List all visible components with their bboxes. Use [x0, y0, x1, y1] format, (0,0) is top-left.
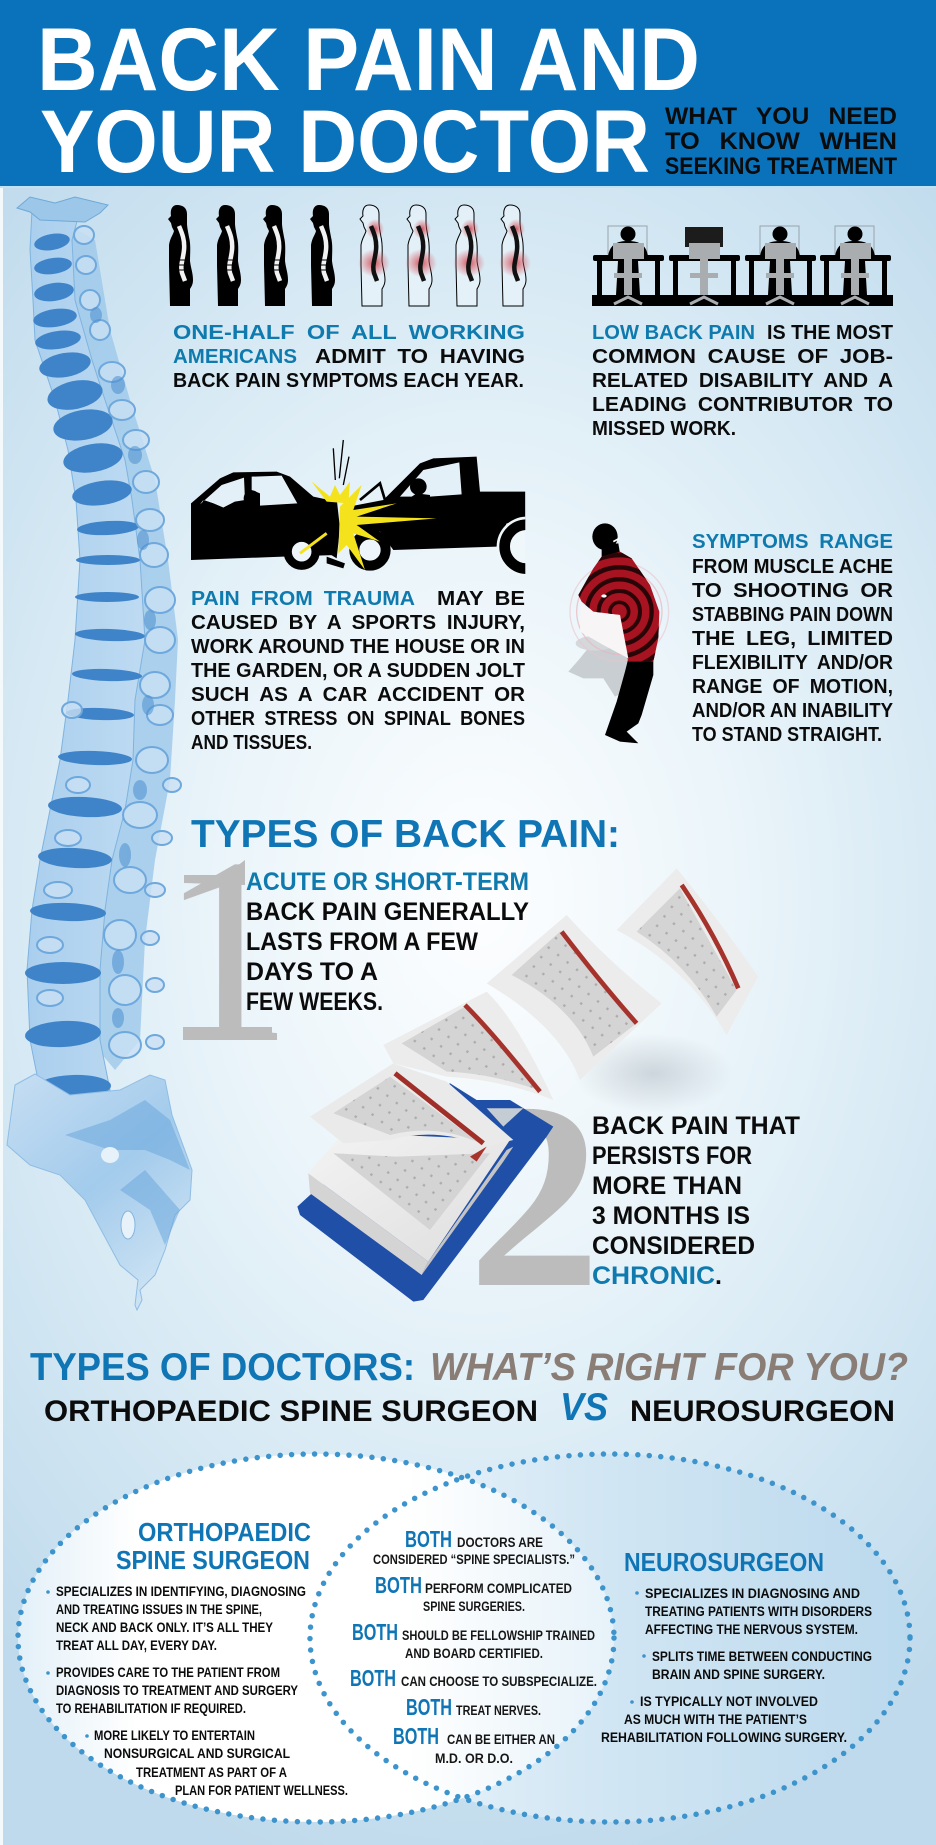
- icon: man holding back with pain target: [568, 523, 670, 744]
- text: pain from trauma: THE GARDEN, OR A SUDDEN JOLT: [191, 659, 525, 682]
- heading: types of doctors: WHAT’S RIGHT FOR YOU?: [430, 1346, 908, 1389]
- text: acute back pain: FEW WEEKS.: [246, 988, 383, 1016]
- subtitle: WHAT YOU NEED: [665, 103, 897, 130]
- text: symptoms range: AND/OR AN INABILITY: [692, 699, 893, 722]
- text: low back pain: LEADING CONTRIBUTOR TO: [592, 393, 893, 416]
- list: NONSURGICAL AND SURGICAL: [104, 1746, 290, 1761]
- heading: types of back pain: TYPES OF BACK PAIN:: [191, 813, 620, 856]
- panel: low back pain: [592, 226, 893, 440]
- list: IS TYPICALLY NOT INVOLVED: [640, 1694, 818, 1709]
- title: BACK PAIN AND: [37, 9, 700, 109]
- subtitle: SEEKING TREATMENT: [665, 153, 897, 180]
- text: pain from trauma: SUCH AS A CAR ACCIDENT OR: [191, 683, 525, 706]
- panel: both doctors: DOCTORS ARE: [457, 1535, 543, 1550]
- text: symptoms range: RANGE OF MOTION,: [692, 675, 893, 698]
- heading: ORTHOPAEDIC: [138, 1517, 311, 1547]
- list: REHABILITATION FOLLOWING SURGERY.: [601, 1730, 847, 1745]
- heading: types of doctors: TYPES OF DOCTORS:: [30, 1346, 415, 1389]
- subheading: orthopaedic vs neurosurgeon: [44, 1386, 895, 1429]
- text: one-half: BACK PAIN SYMPTOMS EACH YEAR.: [173, 369, 524, 392]
- title: [37, 9, 700, 191]
- subheading: orthopaedic vs neurosurgeon: VS: [560, 1386, 608, 1429]
- list: TREATING PATIENTS WITH DISORDERS: [645, 1604, 872, 1619]
- text: low back pain: IS THE MOST: [767, 321, 893, 344]
- heading: SPINE SURGEON: [116, 1545, 310, 1575]
- text: symptoms range: SYMPTOMS RANGE: [692, 530, 893, 553]
- panel: both doctors: BOTH: [393, 1723, 439, 1749]
- list: PLAN FOR PATIENT WELLNESS.: [175, 1783, 348, 1798]
- text: chronic back pain: .: [715, 1262, 722, 1290]
- list: DIAGNOSIS TO TREATMENT AND SURGERY: [56, 1683, 298, 1698]
- text: pain from trauma: CAUSED BY A SPORTS INJURY,: [191, 611, 525, 634]
- page 4: [617, 868, 758, 1035]
- panel: both doctors: PERFORM COMPLICATED: [425, 1581, 572, 1596]
- list: MORE LIKELY TO ENTERTAIN: [94, 1728, 255, 1743]
- panel: both doctors: BOTH: [375, 1572, 422, 1598]
- text: pain from trauma: AND TISSUES.: [191, 731, 312, 754]
- panel: orthopaedic spine surgeon: [46, 1517, 348, 1798]
- page 1: [310, 1063, 513, 1147]
- icon: eight spine silhouettes: [168, 205, 531, 306]
- panel: symptoms range: [563, 523, 893, 746]
- text: symptoms range: TO STAND STRAIGHT.: [692, 723, 882, 746]
- panel: both doctors: TREAT NERVES.: [456, 1703, 541, 1718]
- panel: both doctors: M.D. OR D.O.: [435, 1751, 513, 1766]
- text: symptoms range: FLEXIBILITY AND/OR: [692, 651, 893, 674]
- panel: both doctors: CAN CHOOSE TO SUBSPECIALIZE.: [401, 1674, 597, 1689]
- text: chronic back pain: 3 MONTHS IS: [592, 1202, 750, 1230]
- illustration: blue translucent spine: [7, 197, 192, 1310]
- list: [46, 1584, 348, 1798]
- text: low back pain: RELATED DISABILITY AND A: [592, 369, 893, 392]
- list: TO REHABILITATION IF REQUIRED.: [56, 1701, 246, 1716]
- page 3: [487, 915, 662, 1080]
- list: PROVIDES CARE TO THE PATIENT FROM: [56, 1665, 280, 1680]
- panel: both doctors: BOTH: [350, 1665, 396, 1691]
- page 2: [383, 992, 553, 1100]
- text: one-half: AMERICANS: [173, 345, 297, 368]
- subheading: orthopaedic vs neurosurgeon: NEUROSURGEON: [630, 1395, 895, 1428]
- panel: both doctors: CONSIDERED “SPINE SPECIALISTS.”: [373, 1552, 575, 1567]
- list: SPECIALIZES IN IDENTIFYING, DIAGNOSING: [56, 1584, 306, 1599]
- text: chronic back pain: BACK PAIN THAT: [592, 1112, 800, 1140]
- text: chronic back pain: CONSIDERED: [592, 1232, 755, 1260]
- panel: both doctors: SHOULD BE FELLOWSHIP TRAINED: [402, 1628, 595, 1643]
- list: SPLITS TIME BETWEEN CONDUCTING: [652, 1649, 872, 1664]
- sacrum: [7, 1074, 192, 1310]
- illustration: flying calendar pages: [297, 868, 758, 1302]
- subtitle: TO KNOW WHEN: [665, 128, 897, 155]
- heading: NEUROSURGEON: [624, 1547, 824, 1577]
- text: pain from trauma: [191, 587, 525, 754]
- text: low back pain: [592, 321, 893, 440]
- text: acute back pain: BACK PAIN GENERALLY: [246, 898, 529, 926]
- text: symptoms range: TO SHOOTING OR: [692, 579, 893, 602]
- icon: car crash: [191, 440, 557, 577]
- spinal processes: [37, 226, 181, 1058]
- text: chronic back pain: MORE THAN: [592, 1172, 742, 1200]
- panel: both doctors: SPINE SURGERIES.: [423, 1599, 525, 1614]
- panel: both doctors: [350, 1526, 597, 1766]
- subtitle: [665, 103, 897, 180]
- header banner: [0, 0, 936, 191]
- numeral 2: 2: [468, 1048, 601, 1343]
- panel: one-half of working Americans: [168, 205, 531, 392]
- text: acute back pain: ACUTE OR SHORT-TERM: [246, 868, 529, 896]
- text: one-half: ADMIT TO HAVING: [315, 345, 525, 368]
- text: low back pain: COMMON CAUSE OF JOB-: [592, 345, 893, 368]
- list: BRAIN AND SPINE SURGERY.: [652, 1667, 825, 1682]
- text: symptoms range: THE LEG, LIMITED: [692, 627, 893, 650]
- panel: pain from trauma: [191, 440, 557, 754]
- list: TREATMENT AS PART OF A: [136, 1765, 287, 1780]
- list: AS MUCH WITH THE PATIENT’S: [624, 1712, 807, 1727]
- venn diagram: [18, 1454, 910, 1822]
- list: SPECIALIZES IN DIAGNOSING AND: [645, 1586, 860, 1601]
- heading: [116, 1517, 311, 1575]
- text: chronic back pain: CHRONIC: [592, 1262, 715, 1290]
- calendar base: [297, 1083, 553, 1302]
- text: low back pain: MISSED WORK.: [592, 417, 736, 440]
- text: one-half: [173, 321, 525, 392]
- title: YOUR DOCTOR: [40, 91, 650, 191]
- page block: [308, 1173, 428, 1275]
- list: NECK AND BACK ONLY. IT’S ALL THEY: [56, 1620, 273, 1635]
- panel: both doctors: AND BOARD CERTIFIED.: [405, 1646, 543, 1661]
- list: AFFECTING THE NERVOUS SYSTEM.: [645, 1622, 858, 1637]
- text: acute back pain: DAYS TO A: [246, 958, 378, 986]
- vertebral discs: [24, 231, 145, 1100]
- text: pain from trauma: MAY BE: [437, 587, 525, 610]
- list: TREAT ALL DAY, EVERY DAY.: [56, 1638, 217, 1653]
- list: AND TREATING ISSUES IN THE SPINE,: [56, 1602, 262, 1617]
- text: symptoms range: FROM MUSCLE ACHE: [692, 555, 893, 578]
- text: symptoms range: [692, 530, 893, 746]
- top vertebra: [17, 197, 108, 222]
- text: pain from trauma: OTHER STRESS ON SPINAL BONES: [191, 707, 525, 730]
- text: pain from trauma: WORK AROUND THE HOUSE OR IN: [191, 635, 525, 658]
- panel: both doctors: BOTH: [352, 1619, 398, 1645]
- text: chronic back pain: [592, 1112, 800, 1290]
- subheading: orthopaedic vs neurosurgeon: ORTHOPAEDIC SPINE SURGEON: [44, 1395, 538, 1428]
- heading: types of doctors: [30, 1346, 908, 1389]
- icon: office desks and workers: [592, 226, 893, 306]
- text: low back pain: LOW BACK PAIN: [592, 321, 755, 344]
- panel: both doctors: CAN BE EITHER AN: [447, 1732, 555, 1747]
- panel: both doctors: BOTH: [406, 1694, 452, 1720]
- text: symptoms range: STABBING PAIN DOWN: [692, 603, 893, 626]
- list: [601, 1586, 872, 1745]
- panel: both doctors: BOTH: [405, 1526, 452, 1552]
- text: pain from trauma: PAIN FROM TRAUMA: [191, 587, 415, 610]
- text: acute back pain: [246, 868, 529, 1016]
- text: chronic back pain: PERSISTS FOR: [592, 1142, 752, 1170]
- text: acute back pain: LASTS FROM A FEW: [246, 928, 478, 956]
- panel: neurosurgeon: [601, 1547, 872, 1745]
- text: one-half: ONE-HALF OF ALL WORKING: [173, 321, 525, 344]
- numeral 1: 1: [160, 803, 293, 1098]
